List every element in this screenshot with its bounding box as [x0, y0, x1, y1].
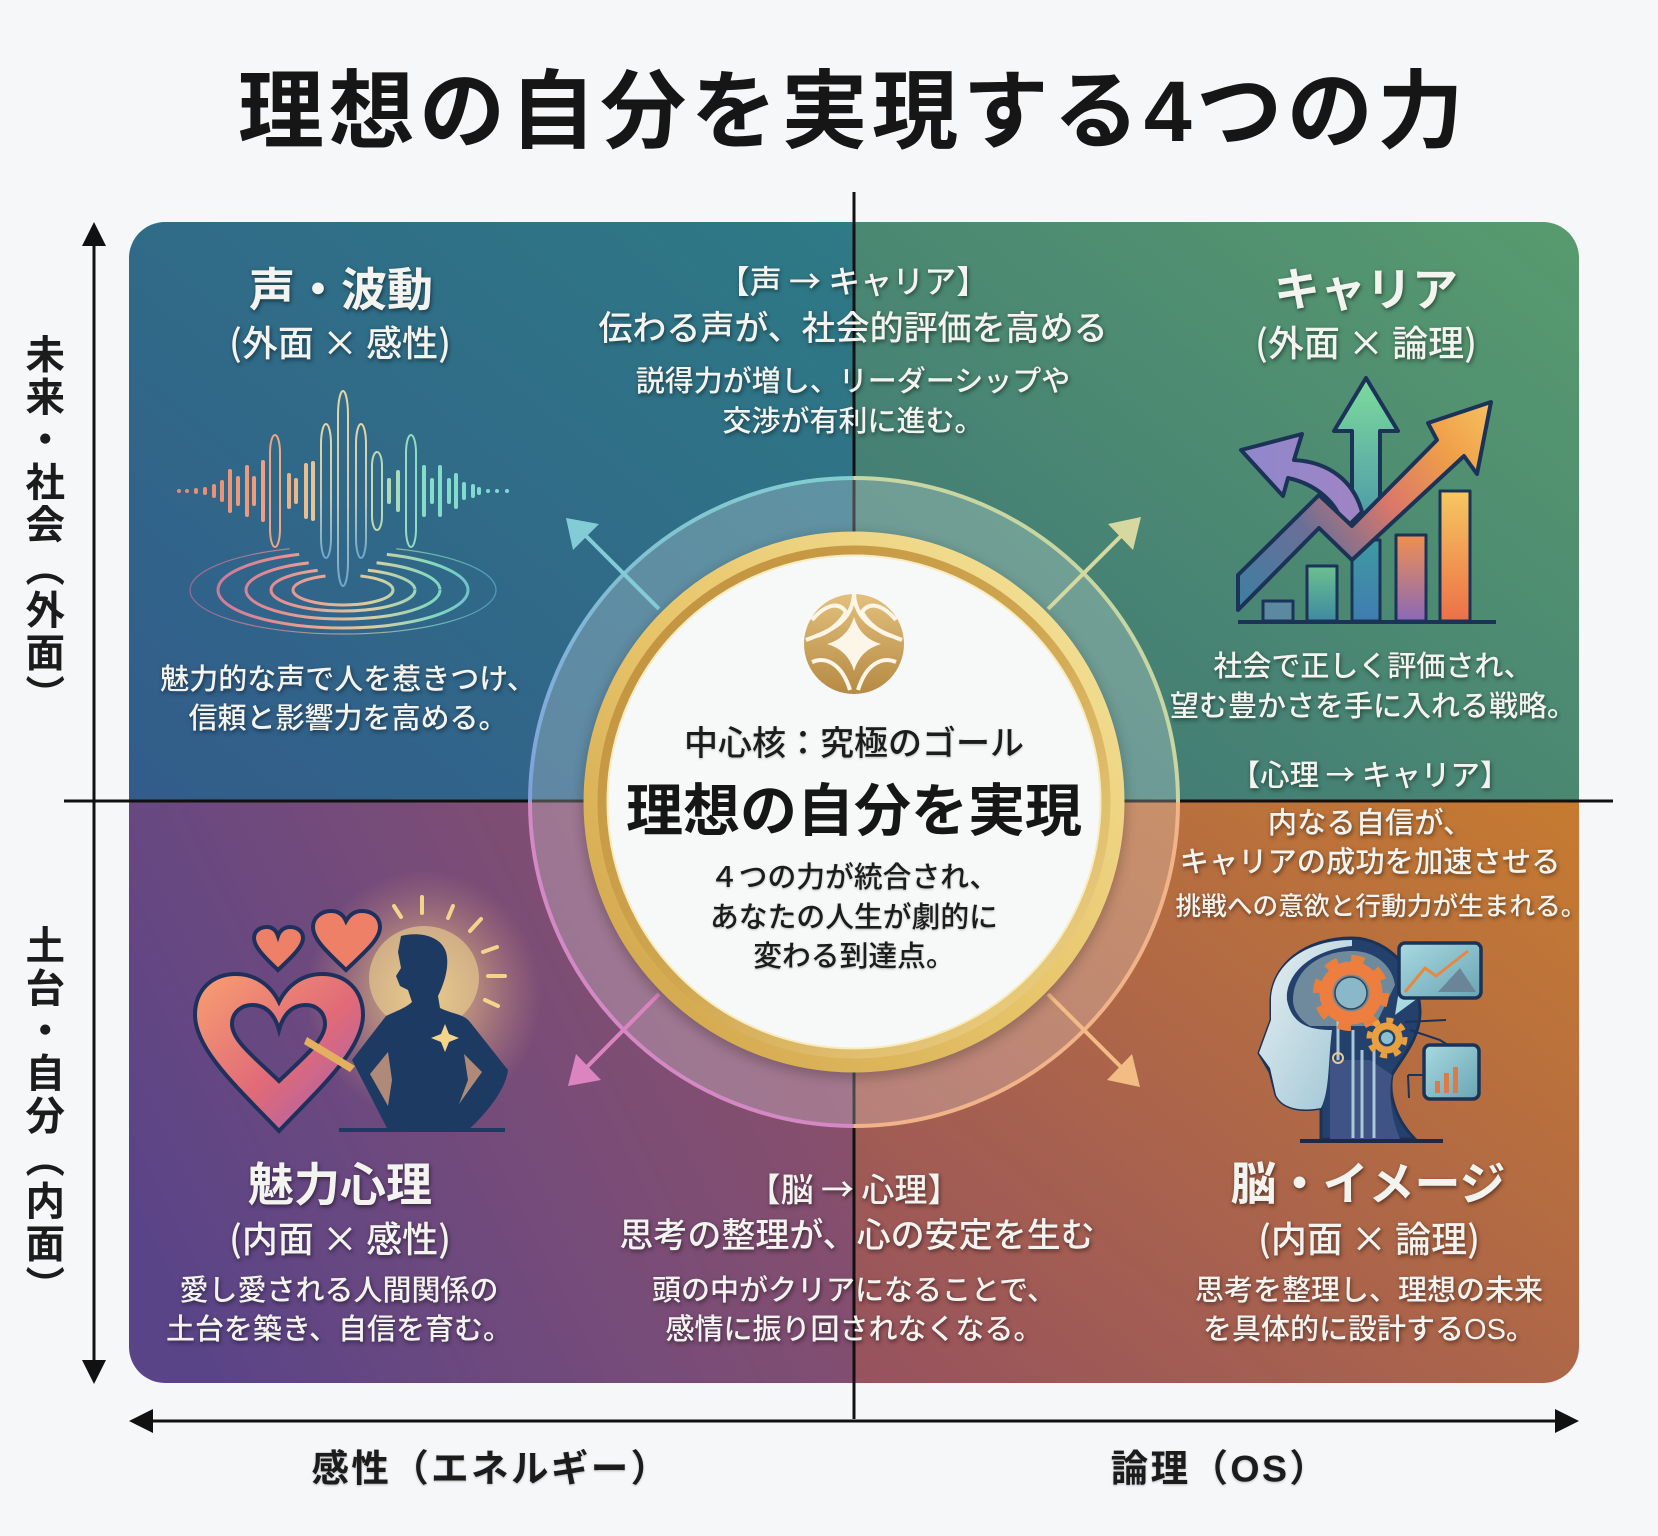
text: charm description: 土台を築き、自信を育む。	[166, 1314, 512, 1346]
text: charm description	[166, 1275, 512, 1346]
text: charm description: 愛し愛される人間関係の	[179, 1275, 499, 1307]
text: relation body	[652, 1275, 1056, 1346]
text: center body: あなたの人生が劇的に	[710, 901, 998, 933]
panel: bottom left quadrant	[129, 800, 854, 1383]
text: relation body: 感情に振り回されなくなる。	[665, 1314, 1043, 1346]
label: left horizontal axis: 感性（エネルギー）	[311, 1447, 671, 1489]
text: voice description: 魅力的な声で人を惹きつけ、	[160, 664, 536, 696]
text: relation headline: 内なる自信が、	[1268, 807, 1472, 840]
label: lower vertical axis: 土台・自分（内面）	[20, 925, 64, 1308]
subheading: 外面×感性: (外面 × 感性)	[229, 315, 451, 367]
subheading: 内面×論理: (内面 × 論理)	[1258, 1211, 1480, 1263]
heading: 脳・イメージ: 脳・イメージ	[1230, 1158, 1506, 1210]
text: relation headline: 思考の整理が、心の安定を生む	[619, 1217, 1095, 1255]
text: brain description: 思考を整理し、理想の未来	[1195, 1275, 1543, 1307]
text: center small heading: 中心核：究極のゴール	[684, 725, 1024, 763]
text: relation headline	[1180, 807, 1560, 879]
heading: キャリア: キャリア	[1274, 264, 1458, 316]
text: career description	[1170, 651, 1576, 723]
panel: bottom right quadrant	[854, 800, 1579, 1383]
arrow: to top right	[1048, 517, 1141, 609]
panel: four quadrant background	[129, 222, 1579, 1383]
arrow: to bottom right	[1048, 994, 1140, 1087]
text: 脳→心理 relation: 【脳 → 心理】	[748, 1164, 960, 1212]
text: voice description	[160, 664, 536, 735]
subheading: 内面×感性: (内面 × 感性)	[229, 1211, 451, 1263]
text: relation headline: 伝わる声が、社会的評価を高める	[598, 310, 1108, 348]
icon: gold emblem	[804, 594, 904, 694]
heading: 魅力心理: 魅力心理	[248, 1159, 432, 1211]
text: voice description: 信頼と影響力を高める。	[188, 703, 508, 735]
text: 声→キャリア relation: 【声 → キャリア】	[718, 257, 988, 303]
text: relation body: 頭の中がクリアになることで、	[652, 1275, 1056, 1307]
panel: top left quadrant	[129, 222, 854, 800]
icon: brain head with gears and chart boxes	[1259, 938, 1481, 1143]
heading: 声・波動: 声・波動	[249, 264, 433, 316]
text: center main heading: 理想の自分を実現	[626, 780, 1082, 844]
subheading: 外面×論理: (外面 × 論理)	[1255, 315, 1477, 367]
text: career description: 望む豊かさを手に入れる戦略。	[1170, 691, 1576, 723]
text: relation body: 交渉が有利に進む。	[722, 406, 984, 438]
arrow: to bottom left	[568, 994, 659, 1086]
arrow: to top left	[566, 518, 659, 609]
label: upper vertical axis: 未来・社会（外面）	[20, 334, 64, 717]
text: center body	[710, 862, 998, 973]
center ring: translucent outer ring	[530, 478, 1178, 1126]
text: brain description: を具体的に設計するOS。	[1203, 1314, 1535, 1346]
label: right horizontal axis: 論理（OS）	[1111, 1447, 1329, 1489]
icon: sound wave and ripples	[177, 391, 509, 634]
text: relation body: 挑戦への意欲と行動力が生まれる。	[1176, 893, 1586, 921]
arrow: vertical axis	[82, 222, 106, 1384]
text: center body: ４つの力が統合され、	[710, 862, 998, 894]
panel: top right quadrant	[854, 222, 1579, 800]
text: relation headline: キャリアの成功を加速させる	[1180, 846, 1560, 879]
text: relation body: 説得力が増し、リーダーシップや	[636, 366, 1070, 398]
text: career description: 社会で正しく評価され、	[1213, 651, 1533, 683]
center circle: gold ring and white core	[582, 534, 1126, 1078]
text: brain description	[1195, 1275, 1544, 1346]
icon: hearts and person with glow	[195, 870, 542, 1132]
text: 心理→キャリア relation: 【心理 → キャリア】	[1231, 752, 1509, 794]
icon: career arrows and bar chart	[1238, 378, 1496, 624]
title: 理想の自分を実現する4つの力	[238, 64, 1468, 160]
arrow: horizontal axis	[129, 1409, 1579, 1433]
text: relation body	[636, 366, 1071, 438]
text: center body: 変わる到達点。	[753, 941, 955, 973]
axis lines	[64, 192, 1613, 1419]
